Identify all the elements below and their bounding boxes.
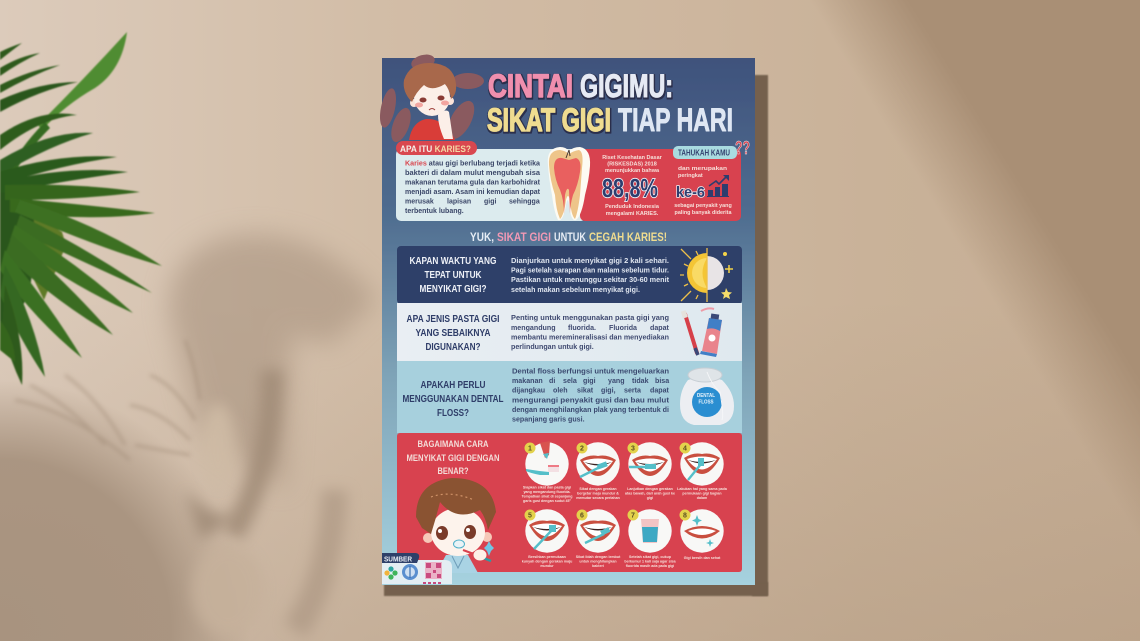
heading: APA JENIS PASTA GIGI — [406, 313, 500, 325]
heading: BENAR? — [438, 466, 469, 477]
riskesdas statistic: (RISKESDAS) 2018 — [607, 162, 657, 168]
panel: statistics — [580, 138, 750, 221]
body text: gigi, — [601, 387, 616, 395]
body text: tidak — [632, 377, 649, 385]
panel: apa itu karies — [396, 141, 586, 221]
title: CINTAI — [488, 68, 573, 104]
sources panel — [382, 553, 452, 584]
title: TIAP HARI — [618, 102, 733, 138]
icon: tooth cross-section — [548, 147, 590, 220]
step 5: 5 — [528, 512, 532, 520]
icon: sun and moon — [680, 248, 733, 302]
heading: BAGAIMANA CARA — [418, 439, 489, 450]
label: tahukah kamu: TAHUKAH KAMU — [678, 148, 730, 158]
definition text: merusak — [405, 198, 434, 206]
step 7: 7 — [631, 512, 635, 520]
step 4: Lakukan hal yang sama pada — [677, 487, 728, 491]
definition text: menjadi asam. Asam ini kemudian dapat — [405, 189, 541, 196]
step 8: 8 — [683, 512, 687, 520]
body text: membantu meremineralisasi dan menyediakan — [511, 334, 669, 342]
heading: DIGUNAKAN? — [426, 341, 480, 353]
definition text: Karies atau gigi berlubang terjadi ketika — [405, 160, 540, 168]
body text: perlindungan untuk gigi. — [511, 343, 594, 351]
rank statistic: peringkat — [678, 173, 703, 179]
palm shadow on wall — [0, 234, 378, 641]
step 1: Tempatkan sikat di sepanjang — [522, 494, 572, 498]
body text — [511, 257, 670, 294]
step 3 — [625, 442, 675, 500]
definition text: lapisan — [447, 198, 471, 206]
rank statistic: ke-6 — [676, 184, 705, 201]
body text: Fluorida — [609, 324, 637, 332]
step 1 — [522, 441, 572, 503]
body text: dapat — [650, 324, 670, 332]
banner heading: CEGAH KARIES! — [589, 232, 667, 244]
riskesdas statistic: mengalami KARIES. — [606, 211, 659, 217]
background bacteria — [377, 52, 484, 145]
step 6 — [576, 509, 621, 568]
step 3: 3 — [631, 446, 635, 452]
body text: bisa — [655, 377, 669, 385]
heading: TEPAT UNTUK — [424, 269, 482, 281]
banner heading — [470, 232, 667, 244]
step 3: gigi — [647, 496, 653, 500]
step 6: Sikat lidah dengan lembut — [576, 555, 621, 559]
step 1: garis gusi dengan sudut 45° — [523, 499, 572, 503]
riskesdas statistic: menunjukkan bahwa — [605, 168, 660, 174]
label: tahukah kamu: ?? — [735, 138, 750, 158]
riskesdas statistic: Riset Kesehatan Dasar — [602, 155, 663, 161]
step 7 — [624, 509, 677, 568]
step 2: 2 — [580, 446, 584, 452]
body text: dijangkau — [512, 387, 545, 395]
heading: MENYIKAT GIGI DENGAN — [406, 453, 500, 464]
body text — [511, 314, 670, 351]
body text: di — [549, 377, 555, 385]
label: apa itu karies: APA ITU KARIES? — [400, 144, 471, 155]
heading — [406, 439, 500, 477]
step 8: Gigi bersih dan sehat — [684, 556, 721, 560]
title — [487, 68, 733, 138]
step 4 — [677, 442, 728, 500]
heading: KAPAN WAKTU YANG — [410, 255, 496, 267]
step 2: bergetar maju mundur & — [577, 492, 619, 496]
step 2: Sikat dengan gerakan — [579, 487, 617, 491]
body text: Penting untuk menggunakan pasta gigi yang — [511, 314, 669, 322]
QR code — [423, 562, 442, 583]
body text: dengan menghilangkan plak yang terbentuk di — [512, 406, 669, 414]
icon: rising bar chart — [707, 175, 729, 196]
step 4: permukaan gigi bagian — [682, 492, 722, 496]
step 5: kunyah dengan gerakan maju — [522, 560, 572, 564]
rank statistic: paling banyak diderita — [675, 210, 732, 216]
banner heading: SIKAT GIGI — [497, 232, 551, 244]
heading — [406, 313, 500, 353]
definition text: bakteri di dalam mulut mengubah sisa — [405, 170, 540, 177]
poster drop shadow — [384, 75, 768, 596]
heading — [410, 255, 496, 295]
step 4: dalam — [697, 496, 707, 500]
step 5: Bersihkan permukaan — [528, 555, 566, 559]
icon: health ministry logo — [384, 566, 398, 580]
step 5 — [522, 509, 572, 568]
body text: dapat — [650, 387, 670, 395]
icon: dental floss container: DENTAL — [697, 393, 715, 399]
heading: FLOSS? — [437, 407, 469, 419]
step 5: mundur — [540, 564, 554, 568]
body text: gigi — [583, 377, 596, 385]
icon: WHO logo — [402, 564, 418, 580]
heading — [402, 379, 504, 419]
rank statistic: sebagai penyakit yang — [674, 203, 732, 209]
body text: oleh — [553, 387, 568, 395]
definition text — [405, 160, 541, 215]
body text: Dental floss berfungsi untuk mengeluarkan — [512, 368, 669, 376]
heading: APAKAH PERLU — [420, 379, 486, 391]
panel: kapan waktu — [397, 246, 742, 304]
poster — [377, 52, 755, 585]
definition text: sehingga — [509, 198, 540, 206]
body text: yang — [608, 377, 625, 385]
banner heading: YUK, — [470, 232, 494, 244]
title: GIGIMU: — [580, 68, 673, 104]
step 7: Setelah sikat gigi, cukup — [629, 555, 672, 559]
definition text: makanan terutama gula dan karbohidrat — [405, 180, 541, 186]
body text: setelah makan sebelum menyikat gigi. — [511, 286, 640, 294]
body text: Pagi setelah sarapan dan malam sebelum tidur. — [511, 266, 669, 274]
step 8 — [680, 509, 724, 560]
icon: dental floss container — [680, 368, 734, 425]
body text: makanan — [512, 377, 543, 385]
character: boy with toothache — [404, 63, 456, 140]
panel: dental floss — [397, 361, 742, 433]
riskesdas statistic: Penduduk Indonesia — [605, 204, 660, 210]
step 2: memutar secara perlahan — [576, 496, 620, 500]
title: SIKAT GIGI — [487, 102, 611, 138]
body text: mengandung — [511, 324, 556, 332]
step 3: atas bawah, dari arah gusi ke — [625, 492, 675, 496]
body text: sela — [563, 377, 577, 385]
step 4: 4 — [683, 446, 687, 452]
panel: jenis pasta gigi — [397, 303, 742, 361]
step 7: berkumur 1 kali saja agar sisa — [624, 560, 677, 564]
body text — [512, 368, 670, 424]
body text: fluorida. — [568, 324, 596, 332]
label: tahukah kamu — [673, 138, 750, 159]
heading: YANG SEBAIKNYA — [416, 327, 491, 339]
body text: Pastikan untuk menunggu sekitar 30-60 menit — [511, 276, 670, 284]
body text: sepanjang garis gusi. — [512, 416, 585, 424]
character: boy brushing teeth — [416, 478, 496, 573]
banner heading: UNTUK — [554, 232, 587, 244]
step 6: untuk menghilangkan — [579, 560, 617, 564]
body text: mengurangi penyakit gusi dan bau mulut — [512, 396, 670, 404]
panel: cara menyikat gigi — [397, 433, 742, 573]
riskesdas statistic: 88,8% — [602, 173, 658, 203]
step 2 — [576, 442, 620, 500]
poster background — [382, 58, 755, 585]
heading: MENGGUNAKAN DENTAL — [402, 393, 504, 405]
step 1: 1 — [528, 446, 532, 452]
rank statistic — [674, 166, 732, 216]
step 3: Lanjutkan dengan gerakan — [627, 487, 673, 491]
step 1: Siapkan sikat dan pasta gigi — [523, 486, 571, 490]
palm plant — [0, 32, 162, 385]
heading: MENYIKAT GIGI? — [420, 283, 486, 295]
definition text: gigi — [484, 198, 496, 206]
step 1: yang mengandung fluorida. — [523, 490, 571, 494]
body text: serta — [624, 387, 641, 395]
definition text: terbentuk lubang. — [405, 208, 464, 215]
label: sumber: SUMBER — [384, 554, 412, 564]
body text: Dianjurkan untuk menyikat gigi 2 kali sehari. — [511, 257, 669, 265]
rank statistic: dan merupakan — [678, 166, 728, 172]
body text: sikat — [577, 387, 594, 395]
icon: dental floss container: FLOSS — [698, 400, 714, 406]
step 6: 6 — [580, 512, 584, 520]
step 7: fluorida masih ada pada gigi — [626, 564, 674, 568]
step 6: bakteri — [592, 564, 604, 568]
icon: toothbrush and toothpaste — [681, 308, 722, 357]
riskesdas statistic — [602, 155, 663, 217]
